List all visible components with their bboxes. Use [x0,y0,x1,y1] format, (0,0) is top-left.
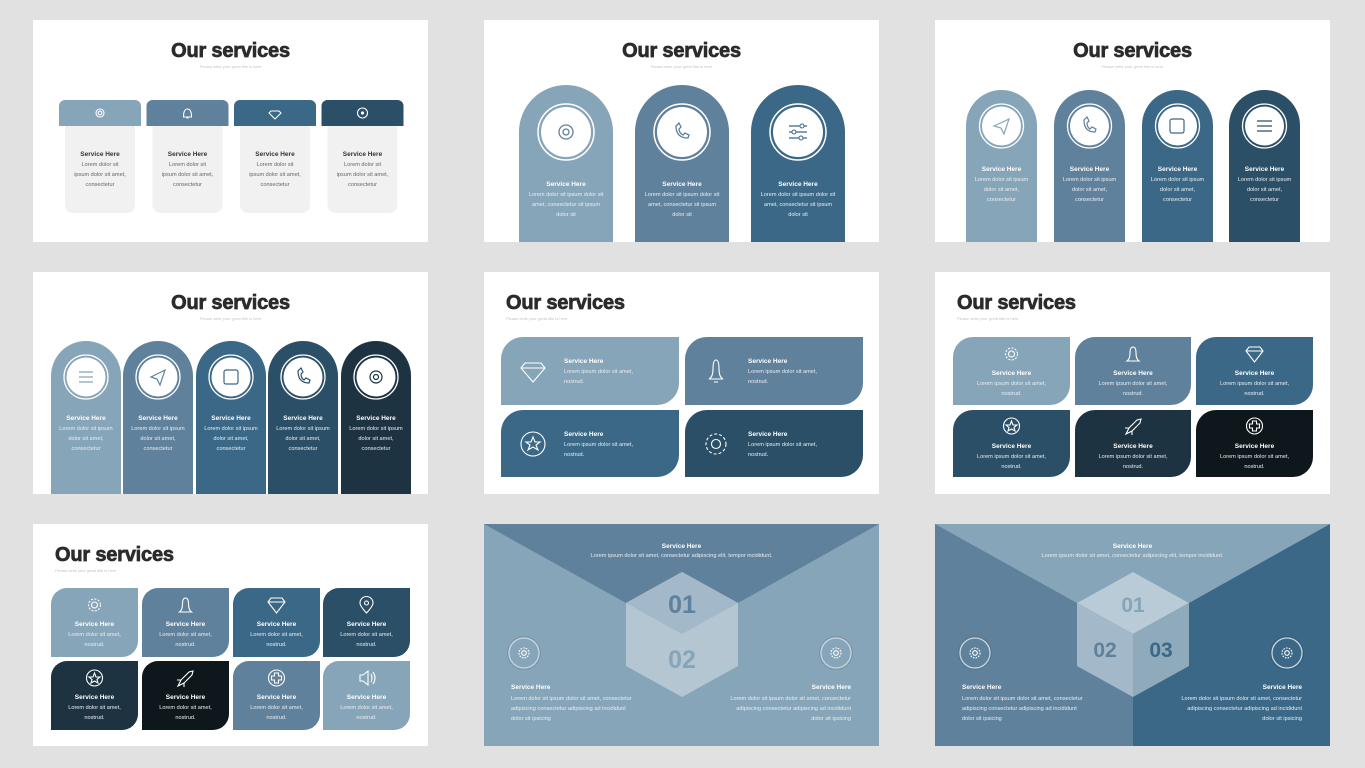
card 2: ipsum dolor sit amet, [162,172,214,178]
card 2: nostrud. [175,642,196,648]
card 5 [51,661,138,730]
arch 1: consectetur [72,446,101,452]
arch 2: Lorem dolor sit ipsum [1063,177,1117,183]
card 3 [234,100,316,213]
card 2: Service Here [1113,370,1153,377]
card 2: Lorem ipsum dolor sit amet, [748,369,817,375]
arch 4: dolor sit amet, [285,436,321,442]
card 2: Service Here [748,358,788,365]
arch 3: dolor sit amet, [213,436,249,442]
arch 2 [635,85,729,242]
top text: Service Here [662,543,702,550]
arch 1: dolor sit amet, [68,436,104,442]
slide 9: hexagon diagram 01 02 03 [935,524,1330,746]
card 2: consectetur [173,182,202,188]
card 2: nostrud. [1123,391,1144,397]
card 4: Service Here [992,443,1032,450]
card 3 [233,588,320,657]
card 1: Service Here [75,621,115,628]
top text: Lorem ipsum dolor sit amet, consectetur adipiscing elit, tempor incididunt. [1042,553,1224,559]
card 4 [685,410,863,477]
arch 1 [966,90,1037,242]
card 5: nostrud. [1123,464,1144,470]
arch 3: amet, consectetur sit ipsum [764,202,832,208]
card 1: nostrud. [564,379,585,385]
arch 4: dolor sit amet, [1247,187,1283,193]
top text: Lorem ipsum dolor sit amet, consectetur adipiscing elit, tempor incididunt. [591,553,773,559]
left text: Lorem dolor sit ipsum dolor sit amet, consectetur [962,696,1083,702]
card 1: nostrud. [1001,391,1022,397]
left text: Service Here [511,684,551,691]
arch 2: amet, consectetur sit ipsum [648,202,716,208]
arch 1: Lorem dolor sit ipsum dolor sit [529,192,604,198]
arch 1: Lorem dolor sit ipsum [975,177,1029,183]
card 1: consectetur [86,182,115,188]
right text [730,684,851,722]
arch 3: Service Here [211,415,251,422]
arch 3: Lorem dolor sit ipsum [204,426,258,432]
right text: Service Here [812,684,851,691]
icon left [958,636,992,670]
title: Our services [171,292,290,314]
arch 2: Service Here [662,181,702,188]
arch 3: dolor sit amet, [1160,187,1196,193]
left text: adipiscing consectetur adipiscing ad incididunt [962,706,1077,712]
subtitle: Please write your great title is here [957,316,1019,321]
arch 2: Lorem dolor sit ipsum dolor sit [645,192,720,198]
right text: Service Here [1263,684,1302,691]
card 3: Lorem dolor sit amet, [250,632,303,638]
top text [591,543,773,559]
card 6: Service Here [166,694,206,701]
card 1 [953,337,1070,405]
icon left [507,636,541,670]
arch 2 [1054,90,1125,242]
arch 5: dolor sit amet, [358,436,394,442]
card 4: Lorem ipsum dolor sit amet, [748,442,817,448]
card 5: Service Here [1113,443,1153,450]
card 6: Service Here [1235,443,1275,450]
arch 3 [196,341,266,494]
arch 3 [1142,90,1213,242]
card 3: nostrud. [266,642,287,648]
card 5: Lorem dolor sit amet, [68,705,121,711]
arch 4: Lorem dolor sit ipsum [276,426,330,432]
subtitle: Please write your great title is here [651,64,713,69]
card 2: Lorem dolor sit [169,162,206,168]
card 4: consectetur [348,182,377,188]
arch 2: Service Here [138,415,178,422]
card 8: Lorem dolor sit amet, [340,705,393,711]
card 4: nostrud. [356,642,377,648]
card 5: nostrud. [84,715,105,721]
right text: dolor sit ipsicing [811,716,851,722]
card 6 [1196,410,1313,477]
card 5: Service Here [75,694,115,701]
left text: Service Here [962,684,1002,691]
arch 3: Service Here [1158,166,1198,173]
arch 3: Lorem dolor sit ipsum [1151,177,1205,183]
card 8: nostrud. [356,715,377,721]
card 3: Lorem dolor sit [256,162,294,168]
arch 5 [341,341,411,494]
card 5: Lorem ipsum dolor sit amet, [1098,454,1168,460]
card 3: nostrud. [564,452,585,458]
card 1 [501,337,679,405]
card 6: nostrud. [1244,464,1265,470]
title: Our services [55,544,174,566]
card 4: Lorem dolor sit [344,162,381,168]
arch 3: consectetur [217,446,246,452]
left text: adipiscing consectetur adipiscing ad incididunt [511,706,626,712]
card 2: Service Here [168,151,208,158]
card 2: Lorem dolor sit amet, [159,632,212,638]
card 3: ipsum dolor sit amet, [249,172,301,178]
arch 4 [1229,90,1300,242]
slide 6: six leaf cards 3x2 [935,272,1330,494]
right text [1181,684,1302,722]
top text [1042,543,1224,559]
arch 5: Lorem dolor sit ipsum [349,426,403,432]
card 2 [146,100,228,213]
arch 4: consectetur [289,446,318,452]
card 3: Service Here [564,431,604,438]
arch 2: consectetur [1075,197,1104,203]
subtitle: Please write your great title is here [55,568,117,573]
arch 1: Service Here [546,181,586,188]
card 4: Lorem dolor sit amet, [340,632,393,638]
slide 1: four tab cards [33,20,428,242]
arch 2: dolor sit amet, [1072,187,1108,193]
card 7: nostrud. [266,715,287,721]
card 6: Lorem ipsum dolor sit amet, [1220,454,1289,460]
arch 1: Service Here [982,166,1022,173]
arch 1: Service Here [66,415,106,422]
right text: dolor sit ipsicing [1262,716,1302,722]
arch 2: Service Here [1070,166,1110,173]
card 6: Lorem dolor sit amet, [159,705,212,711]
right background [1133,524,1330,746]
title: Our services [1073,40,1192,62]
right text: Lorem dolor sit ipsum dolor sit amet, consectetur [1181,696,1302,702]
title: Our services [622,40,741,62]
card 2: nostrud. [748,379,769,385]
card 1: Service Here [80,151,120,158]
card 2 [685,337,863,405]
card 2: Lorem ipsum dolor sit amet, [1098,381,1168,387]
right text: Lorem dolor sit ipsum dolor sit amet, consectetur [730,696,851,702]
arch 2: dolor sit amet, [140,436,176,442]
right text: adipiscing consectetur adipiscing ad incididunt [1187,706,1302,712]
card 3 [501,410,679,477]
card 1 [51,588,138,657]
arch 4: Service Here [1245,166,1285,173]
slide 8: hexagon diagram 01 02 [484,524,879,746]
card 4 [322,100,404,213]
card 3: Service Here [1235,370,1275,377]
card 2: Service Here [166,621,206,628]
subtitle: Please write your great title is here [1102,64,1164,69]
card 3: nostrud. [1244,391,1265,397]
card 3: Service Here [255,151,295,158]
slide 4: five arches [33,272,428,494]
title: Our services [506,292,625,314]
top V band [484,524,879,603]
card 4: Service Here [343,151,383,158]
card 1 [59,100,141,213]
arch 2: consectetur [144,446,173,452]
card 1: Service Here [564,358,604,365]
left text: dolor sit ipsicing [511,716,551,722]
arch 4: consectetur [1250,197,1279,203]
subtitle: Please write your great title is here [200,64,262,69]
arch 4: Service Here [283,415,323,422]
right text: adipiscing consectetur adipiscing ad incididunt [736,706,851,712]
arch 1 [51,341,121,494]
card 1: ipsum dolor sit amet, [74,172,126,178]
number 02: 02 [668,646,696,674]
subtitle: Please write your great title is here [506,316,568,321]
card 6: nostrud. [175,715,196,721]
card 4: nostrud. [748,452,769,458]
arch 1: amet, consectetur sit ipsum [532,202,600,208]
arch 5: Service Here [356,415,396,422]
slide 2: three large arches [484,20,879,242]
top V band [935,524,1330,603]
card 2 [1075,337,1191,405]
arch 3: dolor sit [788,212,808,218]
arch 1: consectetur [987,197,1016,203]
card 1: Lorem ipsum dolor sit amet, [977,381,1046,387]
icon right [819,636,853,670]
card 7: Lorem dolor sit amet, [250,705,303,711]
hexagon [626,572,738,697]
arch 4 [268,341,338,494]
card 4: Lorem ipsum dolor sit amet, [977,454,1046,460]
card 1: nostrud. [84,642,105,648]
card 4: Service Here [347,621,387,628]
arch 5: consectetur [362,446,391,452]
arch 2: dolor sit [672,212,692,218]
number 01: 01 [1121,594,1145,617]
arch 4: Lorem dolor sit ipsum [1238,177,1292,183]
title: Our services [957,292,1076,314]
top text: Service Here [1113,543,1153,550]
left text [511,684,632,722]
card 4: nostrud. [1001,464,1022,470]
arch 3: Service Here [778,181,818,188]
slide 7: eight leaf cards 4x2 [33,524,428,746]
slide 3: four arches [935,20,1330,242]
card 3: Lorem ipsum dolor sit amet, [1220,381,1289,387]
arch 3: Lorem dolor sit ipsum dolor sit [761,192,836,198]
card 8: Service Here [347,694,387,701]
card 1: Lorem dolor sit [82,162,119,168]
card 3: Service Here [257,621,297,628]
card 3: consectetur [261,182,290,188]
card 4: Service Here [748,431,788,438]
slide 5: four leaf cards 2x2 [484,272,879,494]
card 7: Service Here [257,694,297,701]
number 02: 02 [1093,639,1117,662]
left text: dolor sit ipsicing [962,716,1002,722]
number 03: 03 [1149,639,1173,662]
card 8 [323,661,410,730]
title: Our services [171,40,290,62]
card 7 [233,661,320,730]
left text [962,684,1083,722]
card 5 [1075,410,1191,477]
arch 1: dolor sit amet, [984,187,1020,193]
hexagon cube [1077,572,1189,697]
arch 1: Lorem dolor sit ipsum [59,426,113,432]
arch 3 [751,85,845,242]
icon right [1270,636,1304,670]
card 4 [323,588,410,657]
card 4 [953,410,1070,477]
card 2 [142,588,229,657]
arch 3: consectetur [1163,197,1192,203]
arch 2: Lorem dolor sit ipsum [131,426,185,432]
arch 1: dolor sit [556,212,576,218]
card 6 [142,661,229,730]
card 3 [1196,337,1313,405]
arch 2 [123,341,193,494]
card 4: ipsum dolor sit amet, [337,172,389,178]
card 1: Lorem dolor sit amet, [68,632,121,638]
card 1: Lorem ipsum dolor sit amet, [564,369,633,375]
subtitle: Please write your great title is here [200,316,262,321]
number 01: 01 [668,591,696,619]
arch 1 [519,85,613,242]
left text: Lorem dolor sit ipsum dolor sit amet, consectetur [511,696,632,702]
card 3: Lorem ipsum dolor sit amet, [564,442,633,448]
card 1: Service Here [992,370,1032,377]
